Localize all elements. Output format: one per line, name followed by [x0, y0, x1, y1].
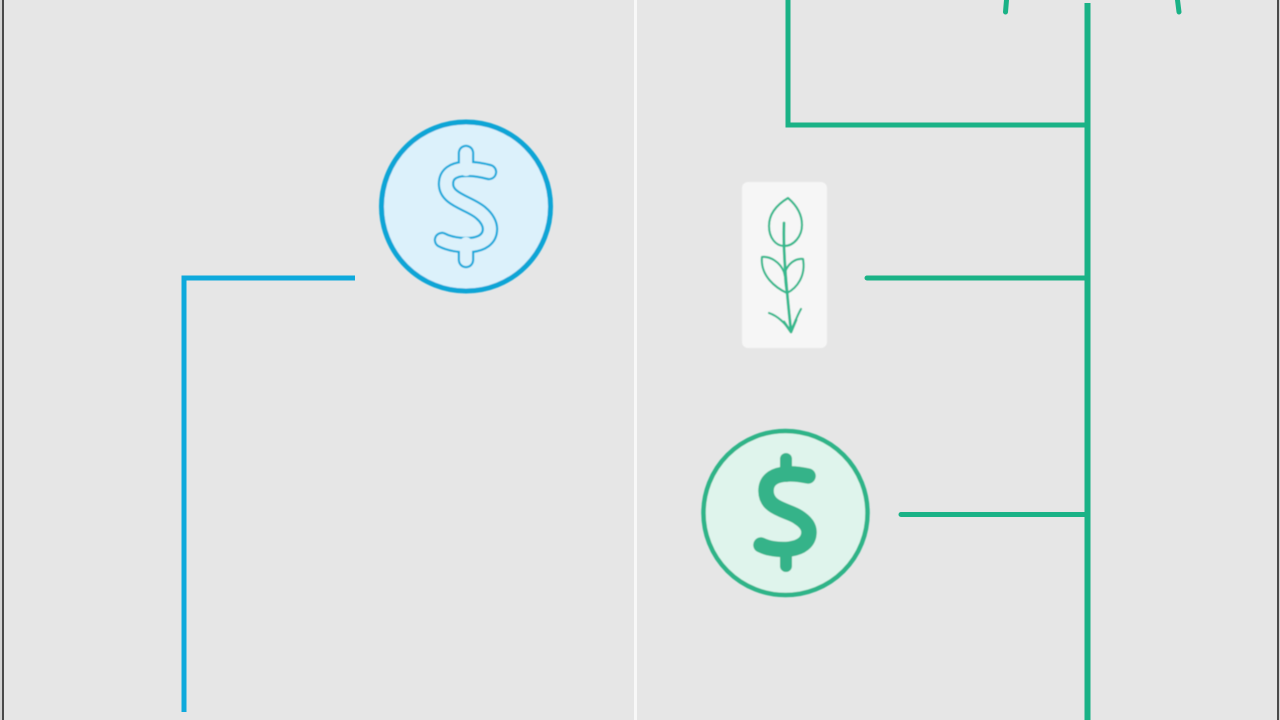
green connector: upper elbow	[788, 0, 1087, 125]
icon: green solid dollar coin	[704, 431, 868, 595]
green vertical trunk	[1084, 3, 1090, 720]
icon: plant with leaves	[762, 198, 804, 332]
icon: blue outlined dollar coin	[382, 122, 550, 291]
green tick right	[1178, 0, 1179, 12]
blue connector arrow	[184, 278, 355, 712]
green tick left	[1006, 0, 1007, 12]
panel: plant card	[742, 182, 827, 348]
green connector to plant card	[867, 276, 1087, 280]
green connector to dollar coin	[901, 512, 1087, 517]
